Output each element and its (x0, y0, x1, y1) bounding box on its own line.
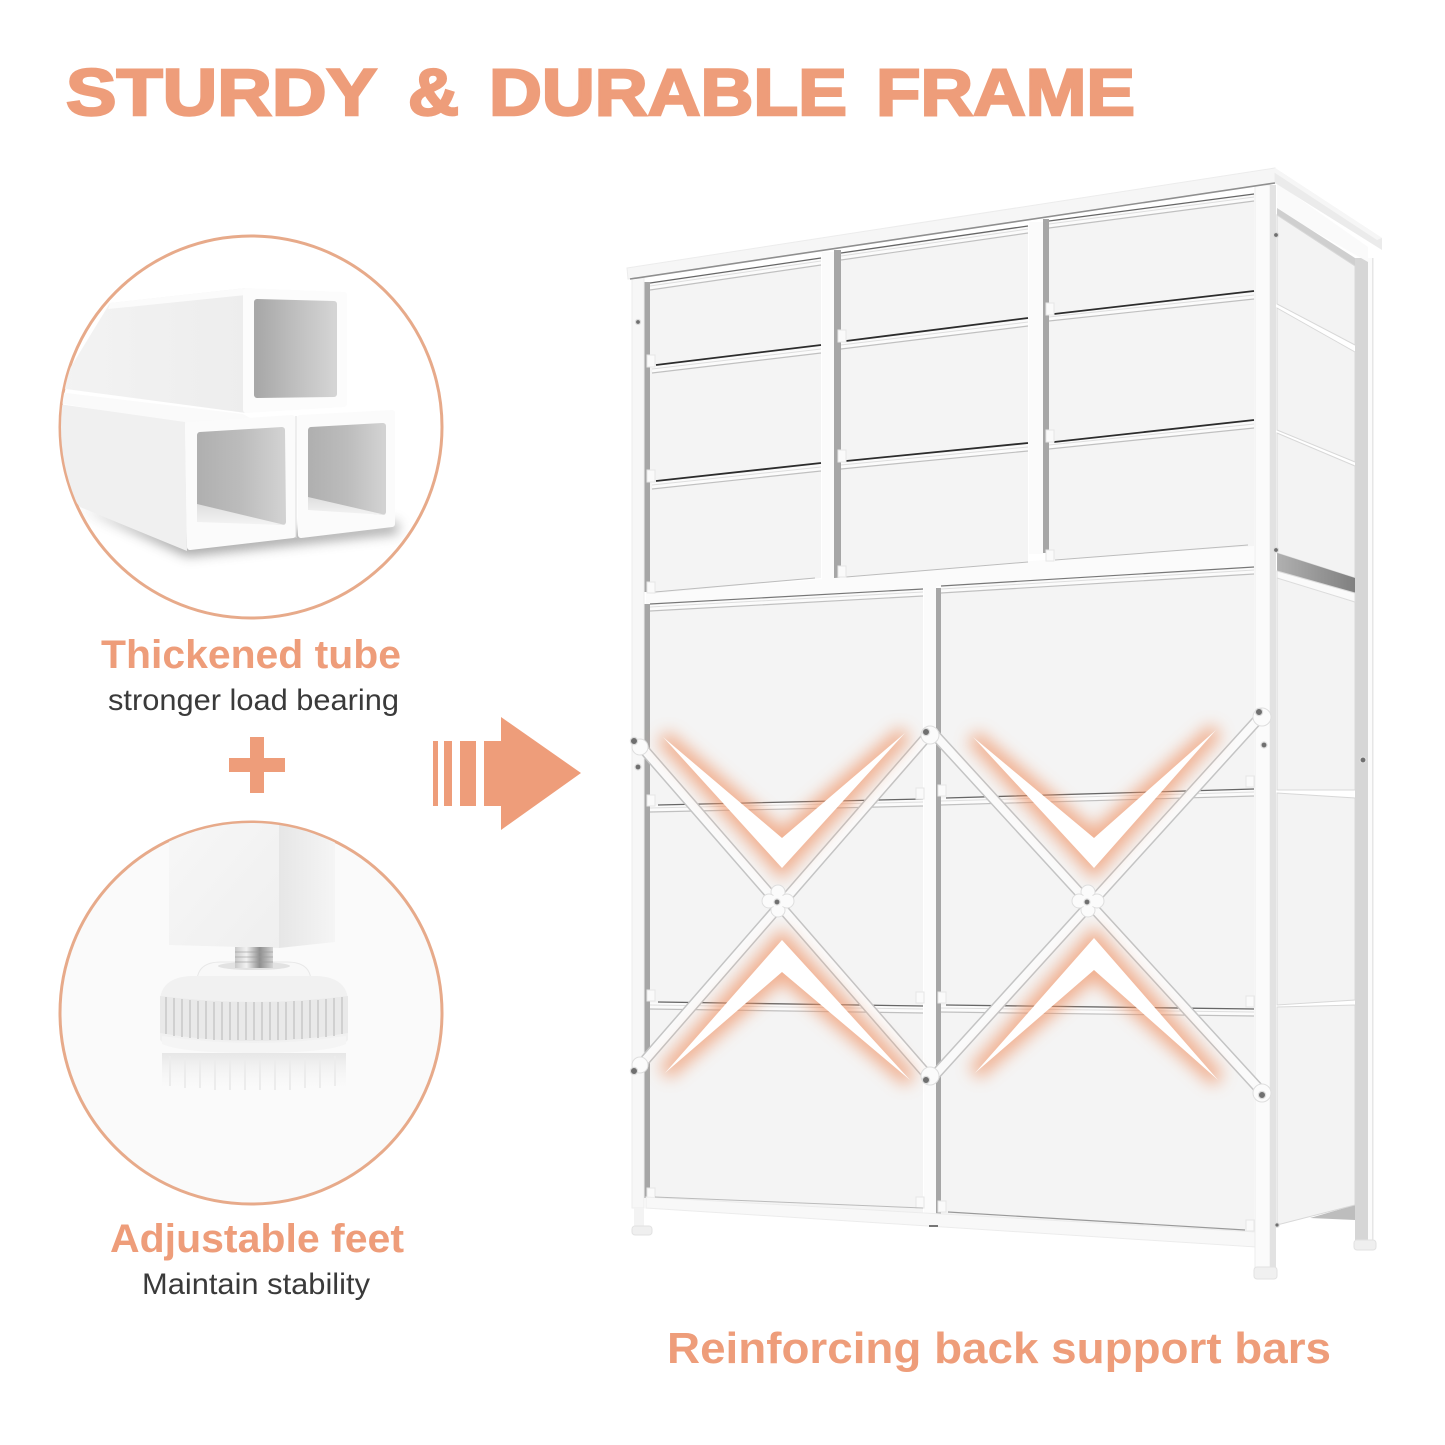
icon: plus (229, 737, 285, 793)
center posts (822, 222, 1043, 1226)
glow chevrons (663, 730, 1218, 1080)
icon: square steel tubes (58, 288, 398, 556)
title: DURABLE (489, 55, 847, 129)
caption: reinforcing back support bars: Reinforcing back support bars (667, 1324, 1331, 1373)
arrow (433, 717, 581, 830)
x bars (640, 715, 1262, 1092)
title: & (408, 55, 459, 129)
drawer stitching rails (650, 198, 1254, 1013)
title: STURDY (66, 55, 377, 129)
panel: cabinet product (627, 168, 1382, 1279)
title (66, 55, 1135, 129)
text: maintain stability: Maintain stability (142, 1268, 370, 1301)
side panels (1277, 183, 1368, 262)
joints and screws (632, 708, 1271, 1102)
heading: thickened tube: Thickened tube (101, 633, 401, 677)
title: FRAME (876, 55, 1135, 129)
panel: adjustable feet circle (60, 820, 442, 1204)
drawers (650, 195, 1254, 1235)
mid rail (646, 546, 1254, 604)
gray post sides (644, 219, 1049, 1218)
drawer dark gaps (656, 291, 1254, 481)
left post (632, 278, 644, 1208)
panel: thickened tube circle (58, 236, 442, 618)
white chevrons (663, 730, 1218, 1080)
right post (1255, 185, 1270, 1268)
text: stronger load bearing: stronger load bearing (108, 684, 399, 717)
back post (1355, 258, 1373, 1240)
corner brackets (647, 303, 1254, 1231)
heading: adjustable feet: Adjustable feet (110, 1217, 404, 1261)
bottom rail (646, 1197, 1256, 1247)
icon: adjustable foot (160, 820, 348, 1091)
top board (627, 168, 1275, 279)
